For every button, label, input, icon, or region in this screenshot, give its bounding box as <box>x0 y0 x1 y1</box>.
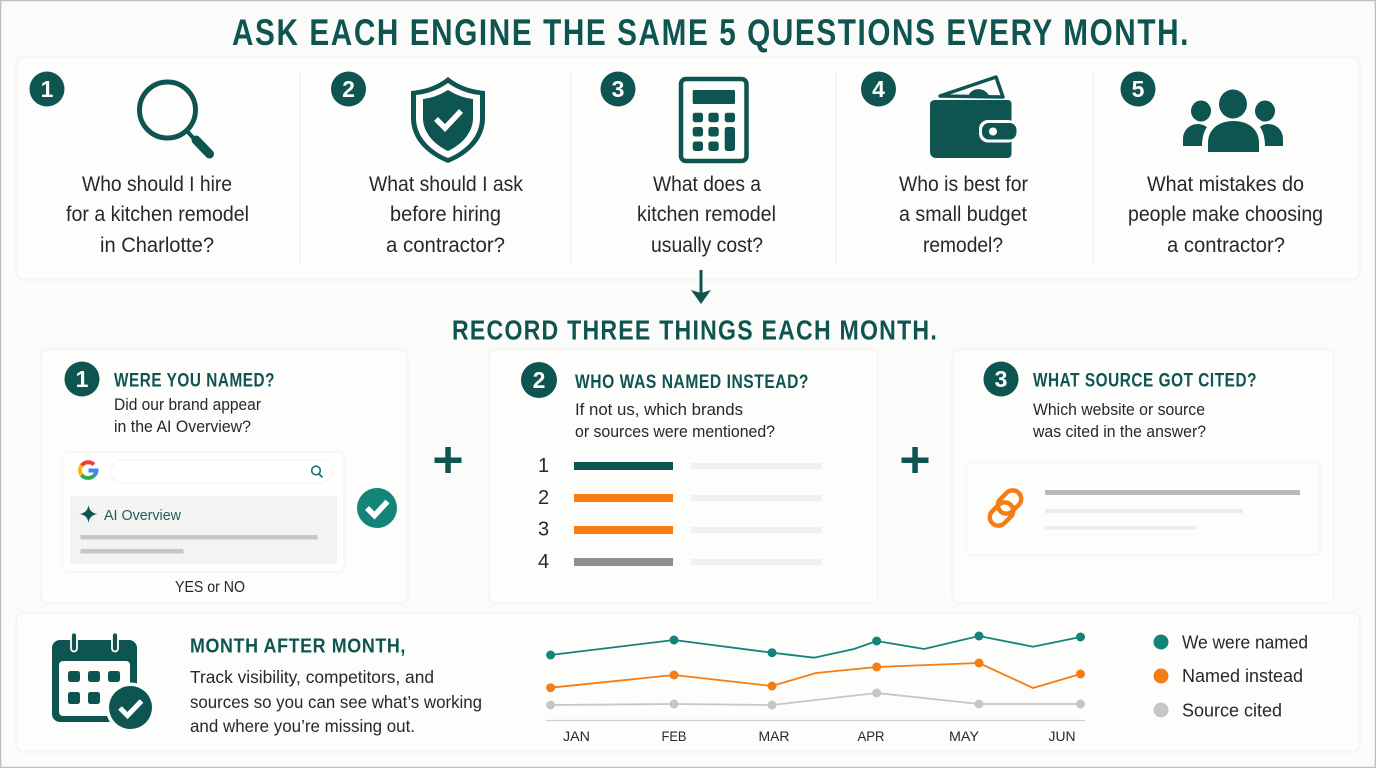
question 5 <box>1120 72 1323 257</box>
icon: calculator <box>681 79 746 161</box>
description: sources so you can see what’s working <box>190 692 482 712</box>
question 2 text: a contractor? <box>386 233 505 257</box>
month labels: JAN <box>563 728 590 744</box>
question 3 <box>600 72 776 257</box>
question 4 text: Who is best for <box>899 172 1028 196</box>
description: was cited in the answer? <box>1032 423 1206 441</box>
line chart <box>546 632 1085 744</box>
description <box>114 396 261 436</box>
question 1 text: for a kitchen remodel <box>66 202 249 226</box>
description: Which website or source <box>1033 401 1205 419</box>
question 3 text: kitchen remodel <box>637 202 776 226</box>
description: in the AI Overview? <box>114 418 251 436</box>
description <box>575 401 775 441</box>
badge 2 <box>521 362 557 398</box>
description <box>190 667 482 736</box>
month labels: APR <box>858 728 884 744</box>
question 5 text: people make choosing <box>1128 202 1323 226</box>
question 4 text <box>899 172 1028 257</box>
AI overview box: AI Overview <box>104 507 181 524</box>
heading: record three things: RECORD THREE THINGS EACH MONTH. <box>452 314 938 346</box>
icon: magnifying glass <box>140 82 210 154</box>
description: Track visibility, competitors, and <box>190 667 434 687</box>
AI overview box <box>70 496 337 564</box>
ranked list: 1 <box>538 455 549 477</box>
month labels: FEB <box>662 728 686 744</box>
panel: what source got cited <box>952 350 1334 603</box>
panel: who was named instead <box>489 350 878 603</box>
question 2 text <box>369 172 523 257</box>
question 1 text <box>66 172 249 257</box>
panel: were you named <box>41 350 408 603</box>
question 2: 2 <box>342 76 355 102</box>
question 2 text: before hiring <box>390 202 501 226</box>
description: and where you’re missing out. <box>190 716 415 736</box>
icon: shield with check <box>411 77 485 163</box>
heading: who was named instead: WHO WAS NAMED INSTEAD? <box>575 371 809 393</box>
panel: month after month <box>16 613 1360 752</box>
series: we were named <box>546 632 1085 660</box>
question 1 <box>30 72 249 257</box>
series: source cited <box>546 688 1085 710</box>
legend <box>1154 632 1308 720</box>
ranked list <box>538 455 822 573</box>
question 5 text: What mistakes do <box>1147 172 1304 196</box>
question 1: 1 <box>41 76 54 102</box>
month labels: MAR <box>758 728 790 744</box>
icon: green check <box>357 488 397 528</box>
legend: Source cited <box>1182 700 1282 720</box>
heading: were you named: WERE YOU NAMED? <box>114 370 275 392</box>
description: If not us, which brands <box>575 401 743 419</box>
icon: Google G <box>80 462 96 478</box>
description <box>1032 401 1206 441</box>
badge 3: 3 <box>995 366 1007 392</box>
description: or sources were mentioned? <box>575 423 775 441</box>
question 5 text <box>1128 172 1323 257</box>
series: named instead <box>546 658 1085 692</box>
icon: plus <box>434 447 462 473</box>
source card <box>966 462 1320 555</box>
question 4: 4 <box>872 76 885 102</box>
icon: plus <box>902 447 928 473</box>
legend: We were named <box>1182 632 1308 652</box>
question 5: 5 <box>1132 76 1145 102</box>
heading: what source got cited: WHAT SOURCE GOT CITED? <box>1033 370 1257 392</box>
search bar <box>111 460 332 483</box>
badge 1 <box>64 362 100 396</box>
arrow: down to record section <box>691 270 711 304</box>
month labels: JUN <box>1048 728 1076 744</box>
icon: wallet <box>930 77 1017 158</box>
question 1 text: Who should I hire <box>82 172 232 196</box>
question 1 text: in Charlotte? <box>100 233 214 257</box>
ranked list: 4 <box>538 551 549 573</box>
legend: Named instead <box>1182 666 1303 686</box>
question 3: 3 <box>612 76 624 102</box>
icon: group of people <box>1183 90 1283 152</box>
question 4 <box>861 72 1028 257</box>
icon: orange link <box>986 487 1025 529</box>
question 3 text <box>637 172 776 257</box>
ranked list: 2 <box>538 487 549 509</box>
yes or no label: YES or NO <box>175 579 245 596</box>
question 5 text: a contractor? <box>1167 233 1285 257</box>
badge 2: 2 <box>533 367 545 393</box>
question 2 <box>331 72 523 257</box>
badge 1: 1 <box>76 366 89 392</box>
question 4 text: a small budget <box>899 202 1027 226</box>
ranked list: 3 <box>538 518 549 540</box>
badge 3 <box>984 362 1018 396</box>
description: Did our brand appear <box>114 396 261 414</box>
question 2 text: What should I ask <box>369 172 523 196</box>
month labels <box>563 728 1076 744</box>
heading: month after month: MONTH AFTER MONTH, <box>190 634 406 658</box>
search result mockup <box>62 452 344 572</box>
icon: calendar with check <box>52 632 156 732</box>
question 3 text: What does a <box>653 172 761 196</box>
question 4 text: remodel? <box>923 233 1003 257</box>
question 3 text: usually cost? <box>651 233 763 257</box>
month labels: MAY <box>949 728 980 744</box>
